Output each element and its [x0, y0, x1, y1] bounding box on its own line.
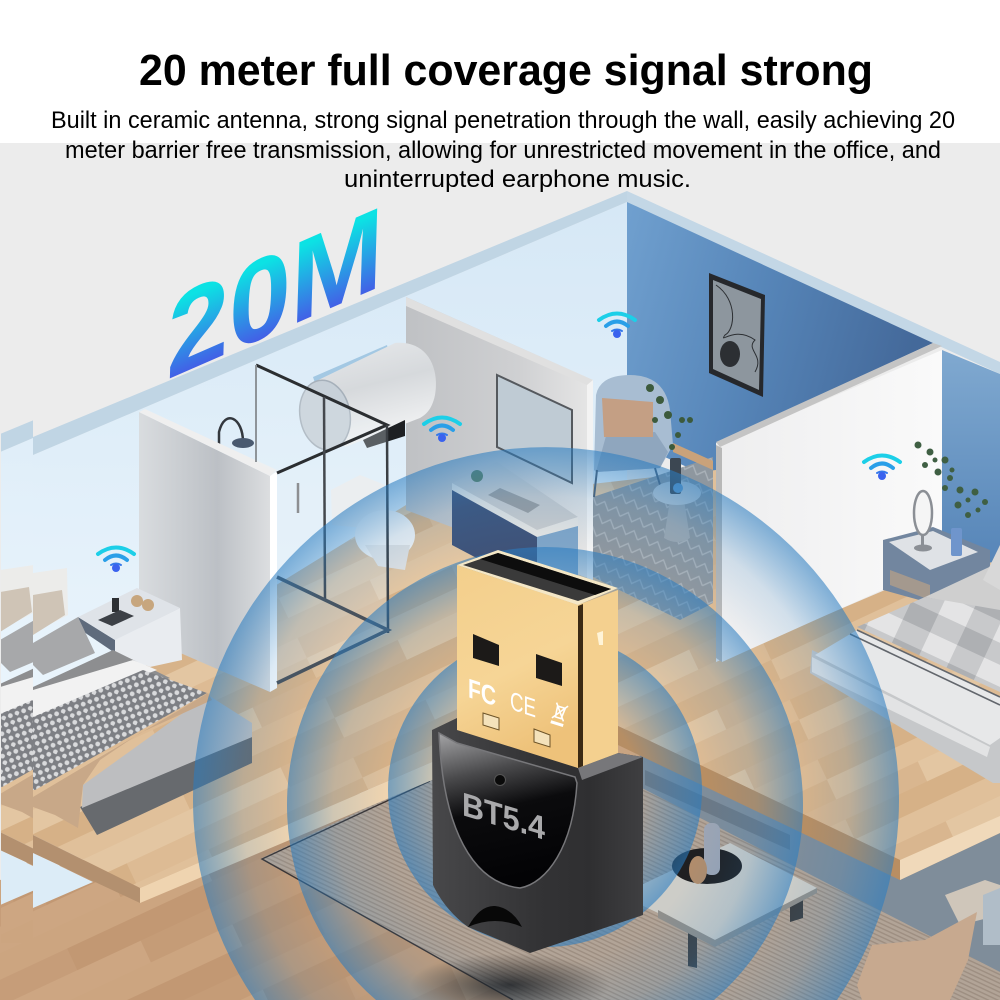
inner signal ring: [388, 633, 702, 947]
contact windows: [473, 634, 499, 666]
bedside table, right: [883, 527, 990, 603]
description text: uninterrupted earphone music.: [344, 166, 691, 193]
bed, right: [810, 545, 1000, 783]
shower head: [219, 418, 254, 448]
description text: Built in ceramic antenna, strong signal penetration through the wall, easily achieving 20: [51, 108, 955, 134]
wood strip behind rug: [673, 443, 713, 470]
title: 20 meter full coverage signal strong: [139, 46, 873, 95]
far right blue wall: [942, 350, 1000, 600]
wall art: [709, 273, 765, 397]
wifi icon: bedroom: [98, 548, 134, 572]
wifi icon: living room: [599, 314, 635, 338]
CE mark: CE: [510, 686, 536, 723]
description text: [51, 108, 955, 193]
description text: meter barrier free transmission, allowing for unrestricted movement in the office, and: [65, 138, 941, 164]
dongle body: [432, 718, 643, 953]
vanity cabinet: [452, 462, 578, 590]
partition wall with TV: [406, 297, 593, 580]
body ledge highlight: [578, 753, 643, 780]
table lamp: [914, 491, 932, 552]
toilet: [331, 475, 415, 570]
lower level light wall: [33, 853, 93, 908]
wifi icon: right bedroom: [864, 456, 900, 480]
USB Bluetooth dongle: [432, 550, 643, 953]
signal rings: [193, 447, 899, 1000]
dongle shadow: [410, 937, 610, 1000]
middle signal ring: [287, 547, 803, 1000]
BT5.4 label: BT5.4: [462, 786, 545, 848]
bathroom partition: [139, 409, 277, 692]
living room patterned rug: [593, 457, 713, 620]
wall TV: [497, 375, 572, 483]
large 20M label: 20M: [165, 181, 385, 406]
USB plug opening: [457, 550, 618, 605]
right partition wall: [716, 343, 942, 662]
lower level floor: [0, 640, 1000, 1000]
USB plug gold face: [457, 565, 618, 768]
bed, left: [33, 568, 252, 835]
glossy badge: [439, 733, 577, 888]
indicator hole: [494, 774, 506, 786]
side table with vase: [653, 458, 701, 542]
plant in living room: [646, 384, 693, 450]
lounge chair: [857, 912, 977, 1000]
coffee table: [620, 823, 817, 968]
armchair: [594, 375, 673, 497]
wall top strip, right run: [627, 191, 1000, 374]
shower glass enclosure: [256, 365, 388, 683]
water heater: [294, 343, 436, 454]
offset slice of the scene at left edge: [1, 420, 33, 926]
wood floor, upper slab: [33, 470, 1000, 888]
slab edges: [33, 703, 1000, 903]
WEEE mark: [551, 703, 569, 726]
outer signal ring: [193, 447, 899, 1000]
living room blue wall: [627, 202, 933, 480]
lower level rug: [262, 770, 1000, 1000]
lower level sofa: [640, 745, 1000, 972]
wifi icon: bathroom: [424, 418, 460, 442]
FC mark: FC: [468, 673, 496, 712]
white header band: [0, 0, 1000, 143]
lanyard notch: [468, 906, 522, 927]
wall top strip, left run: [33, 191, 627, 455]
bedside table, left: [78, 588, 182, 667]
plant in vase, right: [914, 442, 988, 556]
back wall, light blue: [33, 202, 627, 800]
